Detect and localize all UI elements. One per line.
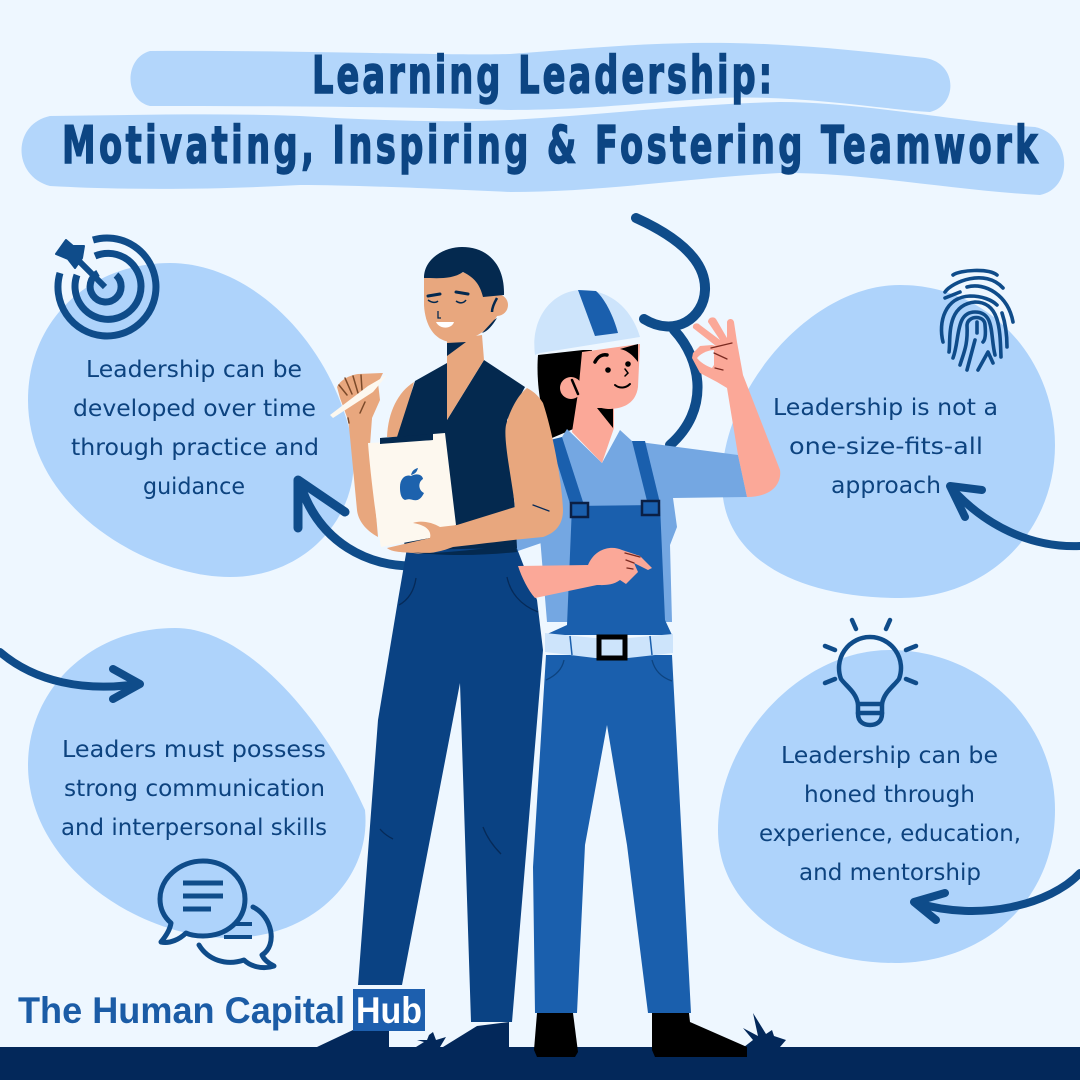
figure: woman (317, 247, 563, 1047)
icon: fingerprint (941, 270, 1013, 370)
straps (550, 437, 584, 510)
arrow: to first panel (298, 480, 412, 566)
fist (337, 373, 383, 428)
stylus (330, 375, 387, 418)
hair (538, 350, 592, 438)
sleeve behind arm (515, 470, 550, 552)
figure: worker (515, 290, 780, 1057)
icon: light bulb (825, 620, 916, 725)
belt (545, 633, 673, 658)
icon: target (56, 238, 156, 336)
panel: experience and mentorship: honed through (804, 782, 975, 808)
panel: develop over time: through practice and (71, 435, 319, 461)
panel: not one-size-fits-all: one-size-fits-all (789, 434, 983, 460)
panel: experience and mentorship: experience, education, (759, 821, 1021, 847)
panel: communication skills: and interpersonal skills (61, 815, 327, 841)
panel: develop over time (28, 263, 354, 577)
panel: develop over time: developed over time (73, 396, 316, 422)
tablet (368, 433, 456, 547)
shirt (525, 429, 747, 622)
face (578, 344, 640, 409)
logo: The Human Capital (18, 990, 345, 1031)
panel: not one-size-fits-all (722, 285, 1055, 598)
eyes, nose, smile (428, 292, 468, 296)
worker lower arm and hand (518, 548, 652, 598)
apple logo (400, 468, 424, 500)
panel: not one-size-fits-all: Leadership is not a (773, 395, 998, 421)
trousers (358, 546, 543, 1022)
panel: not one-size-fits-all: approach (831, 473, 941, 499)
neck (447, 335, 484, 420)
hair (424, 247, 504, 297)
icon: chat bubbles (160, 861, 274, 968)
raised arm and hand (692, 317, 780, 497)
logo: Hub (356, 990, 422, 1031)
panel: communication skills: strong communication (64, 776, 325, 802)
far upper arm (387, 382, 414, 437)
helmet (534, 290, 640, 355)
panel: develop over time: guidance (143, 474, 245, 500)
arrow: to second panel (950, 486, 1080, 546)
title: Learning Leadership: (312, 46, 772, 106)
title: Motivating, Inspiring & Fostering Teamwork (62, 116, 1038, 176)
shoes (317, 1030, 389, 1047)
panel: communication skills: Leaders must possess (62, 737, 326, 763)
near arm and hand (387, 388, 563, 554)
ground (0, 1047, 1080, 1080)
bib (545, 505, 672, 635)
panel: develop over time: Leadership can be (86, 357, 302, 383)
ear (560, 377, 582, 399)
panel: communication skills (28, 628, 366, 938)
eyes and mouth (595, 355, 607, 362)
legs (533, 655, 691, 1013)
panel: experience and mentorship (718, 650, 1055, 963)
arrow: to third panel (0, 652, 140, 699)
icon: grass tufts (416, 1013, 786, 1047)
arrow: to fourth panel (914, 873, 1080, 920)
panel: experience and mentorship: and mentorship (799, 860, 981, 886)
title (22, 43, 1064, 195)
boots (534, 1013, 578, 1057)
pocket and knee creases (380, 577, 538, 854)
panel: experience and mentorship: Leadership can be (781, 743, 998, 769)
face (424, 270, 500, 342)
forearm (348, 418, 378, 537)
neck (572, 393, 614, 463)
arrow: curved behind worker (636, 218, 705, 445)
blouse (397, 360, 525, 550)
